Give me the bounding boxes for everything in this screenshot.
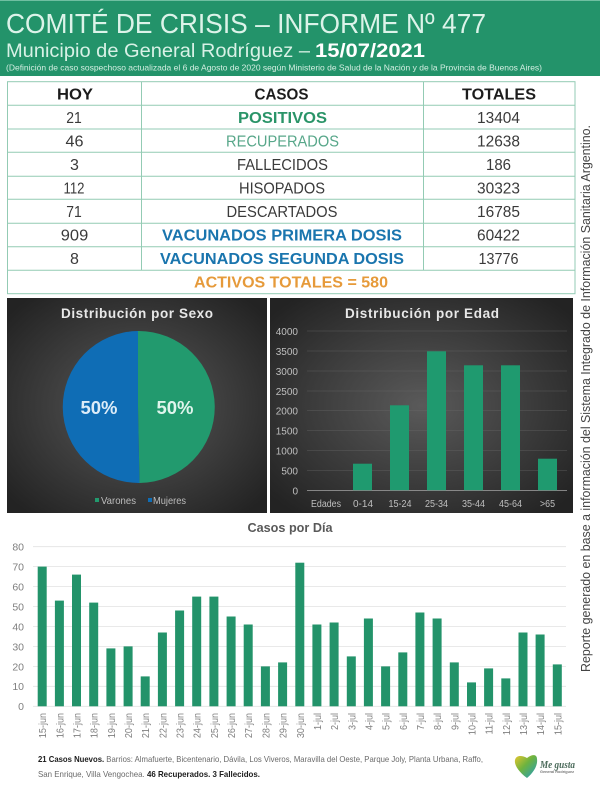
row: vacunados primera dosis: VACUNADOS PRIMERA DOSIS <box>162 228 402 244</box>
row: vacunados primera dosis: 60422 <box>477 228 520 244</box>
daily chart title: Casos por Día <box>248 521 334 535</box>
row: fallecidos <box>70 157 511 174</box>
daily x axis dates: 29-jun <box>278 713 290 738</box>
row: vacunados segunda dosis: 13776 <box>478 251 519 268</box>
row: positivos: POSITIVOS <box>238 110 327 127</box>
row: hisopados: 30323 <box>477 180 520 198</box>
row: descartados: DESCARTADOS <box>226 204 338 221</box>
age axis values: 2500 <box>276 387 298 398</box>
daily x axis dates: 22-jun <box>158 713 170 738</box>
row: hisopados <box>64 180 520 198</box>
daily x axis dates: 25-jun <box>209 713 221 738</box>
age axis values: 3000 <box>276 367 298 378</box>
logo: Me gusta General Rodríguez: General Rodríguez <box>540 770 574 774</box>
row: descartados: 71 <box>66 204 82 221</box>
daily x axis dates: 8-jul <box>433 713 444 730</box>
row: positivos: 21 <box>66 110 82 127</box>
daily x axis dates: 12-jul <box>501 713 513 735</box>
row: vacunados primera dosis <box>61 228 520 244</box>
age axis categories: 35-44 <box>462 499 485 510</box>
row: hisopados: HISOPADOS <box>239 180 325 198</box>
row: descartados: 16785 <box>477 204 520 221</box>
daily y axis: 10 <box>12 681 24 693</box>
age axis values: 4000 <box>276 327 298 338</box>
age axis categories: >65 <box>540 499 555 510</box>
age axis categories <box>311 499 555 510</box>
daily x axis dates: 1-jul <box>312 713 324 730</box>
daily y axis: 70 <box>12 562 24 574</box>
daily x axis dates: 9-jul <box>450 713 462 730</box>
pie legend <box>95 495 186 507</box>
row: descartados <box>66 204 520 221</box>
daily x axis dates: 4-jul <box>364 713 376 730</box>
daily y axis: 50 <box>12 602 24 614</box>
footer note: 21 Casos Nuevos. Barrios: Almafuerte, Bicentenario, Dávila, Los Viveros, Maravilla del Oeste, Parque Joly, Planta Urbana, Raffo, <box>38 755 483 764</box>
header banner <box>0 0 600 76</box>
row: fallecidos: FALLECIDOS <box>237 157 328 174</box>
table header row: TOTALES <box>462 86 536 104</box>
daily x axis dates: 26-jun <box>227 713 238 738</box>
row: recuperados: RECUPERADOS <box>226 134 339 150</box>
row: vacunados segunda dosis: VACUNADOS SEGUNDA DOSIS <box>160 251 404 268</box>
row: recuperados <box>66 134 520 150</box>
daily x axis dates: 17-jun <box>72 713 84 738</box>
daily x axis dates: 16-jun <box>55 713 67 738</box>
daily y axis: 60 <box>12 582 24 594</box>
pie legend: Varones <box>101 495 136 507</box>
age axis values: 1500 <box>276 426 298 438</box>
table header row: HOY <box>57 86 93 104</box>
table header row <box>57 86 536 104</box>
cases table <box>8 82 575 294</box>
daily y axis: 30 <box>12 642 24 654</box>
report date: 15/07/2021 <box>315 41 425 62</box>
pie chart: 50% <box>156 398 194 418</box>
footer note <box>38 755 483 779</box>
row: vacunados primera dosis: 909 <box>61 228 88 244</box>
row: hisopados: 112 <box>64 180 85 198</box>
daily x axis dates: 6-jul <box>398 713 410 730</box>
panel: distribution by age <box>270 298 573 513</box>
daily x axis dates: 5-jul <box>381 713 393 730</box>
daily y axis <box>12 542 24 713</box>
daily x axis dates: 2-jul <box>330 713 341 730</box>
daily x axis dates: 14-jul <box>536 713 547 735</box>
age axis values: 1000 <box>276 446 298 458</box>
subtitle: Municipio de General Rodríguez – <box>6 41 310 62</box>
daily y axis: 20 <box>12 662 24 674</box>
table header row: CASOS <box>254 86 309 104</box>
daily x axis dates: 19-jun <box>106 713 118 738</box>
age axis values: 500 <box>281 466 298 478</box>
daily x axis dates: 20-jun <box>124 713 135 738</box>
age axis categories: 45-64 <box>499 499 522 510</box>
daily x axis dates: 15-jun <box>38 713 49 738</box>
age axis categories: Edades <box>311 499 341 510</box>
age bars <box>353 351 557 490</box>
row: fallecidos: 186 <box>486 157 511 174</box>
daily x axis dates <box>38 713 565 738</box>
age axis values <box>276 327 298 498</box>
vertical source note: Reporte generado en base a información del Sistema Integrado de Información Sanitaria Argentino. <box>579 125 593 672</box>
daily x axis dates: 21-jun <box>141 713 152 738</box>
age axis values: 3500 <box>276 347 298 358</box>
daily x axis dates: 27-jun <box>244 713 255 738</box>
daily x axis dates: 24-jun <box>192 713 204 738</box>
row: recuperados: 46 <box>66 134 84 150</box>
title: COMITÉ DE CRISIS – INFORME Nº 477 <box>6 8 486 39</box>
daily x axis dates: 10-jul <box>467 713 479 735</box>
panel: distribution by sex <box>7 298 267 513</box>
row: fallecidos: 3 <box>70 157 79 174</box>
row: activos totales: ACTIVOS TOTALES = 580 <box>194 274 388 292</box>
daily x axis dates: 3-jul <box>347 713 359 730</box>
row: vacunados segunda dosis: 8 <box>70 251 79 268</box>
daily x axis dates: 30-jun <box>295 713 307 738</box>
daily x axis dates: 18-jun <box>89 713 101 738</box>
daily y axis: 80 <box>12 542 24 554</box>
age axis categories: 15-24 <box>388 499 412 510</box>
daily x axis dates: 11-jul <box>484 713 496 734</box>
daily x axis dates: 15-jul <box>553 713 565 735</box>
chart: cases per day <box>12 521 566 738</box>
daily x axis dates: 23-jun <box>175 713 187 738</box>
daily x axis dates: 28-jun <box>261 713 273 738</box>
pie chart: 50% <box>80 398 118 418</box>
daily x axis dates: 13-jul <box>518 713 530 735</box>
chart title: sex: Distribución por Sexo <box>61 306 213 321</box>
pie legend: Mujeres <box>153 495 186 507</box>
logo: Me gusta General Rodríguez <box>515 755 575 778</box>
daily bars <box>38 563 562 706</box>
footer note: San Enrique, Villa Vengochea. 46 Recuperados. 3 Fallecidos. <box>38 770 260 779</box>
row: vacunados segunda dosis <box>70 251 519 268</box>
chart title: age: Distribución por Edad <box>345 306 499 321</box>
daily y axis: 0 <box>18 701 24 713</box>
row: positivos <box>66 110 520 127</box>
row: recuperados: 12638 <box>477 134 520 150</box>
daily x axis dates: 7-jul <box>415 713 427 730</box>
logo: Me gusta General Rodríguez: Me gusta <box>539 760 575 771</box>
case definition note: (Definición de caso sospechoso actualizada el 6 de Agosto de 2020 según Ministerio de Salud de la Nación y de la Provincia de Buenos Aires) <box>6 62 542 72</box>
row: positivos: 13404 <box>477 110 520 127</box>
age axis categories: 0-14 <box>353 499 373 510</box>
pie chart <box>63 331 215 483</box>
age axis values: 0 <box>292 486 298 498</box>
age axis categories: 25-34 <box>425 499 448 510</box>
daily y axis: 40 <box>12 622 24 634</box>
age axis values: 2000 <box>276 406 298 418</box>
